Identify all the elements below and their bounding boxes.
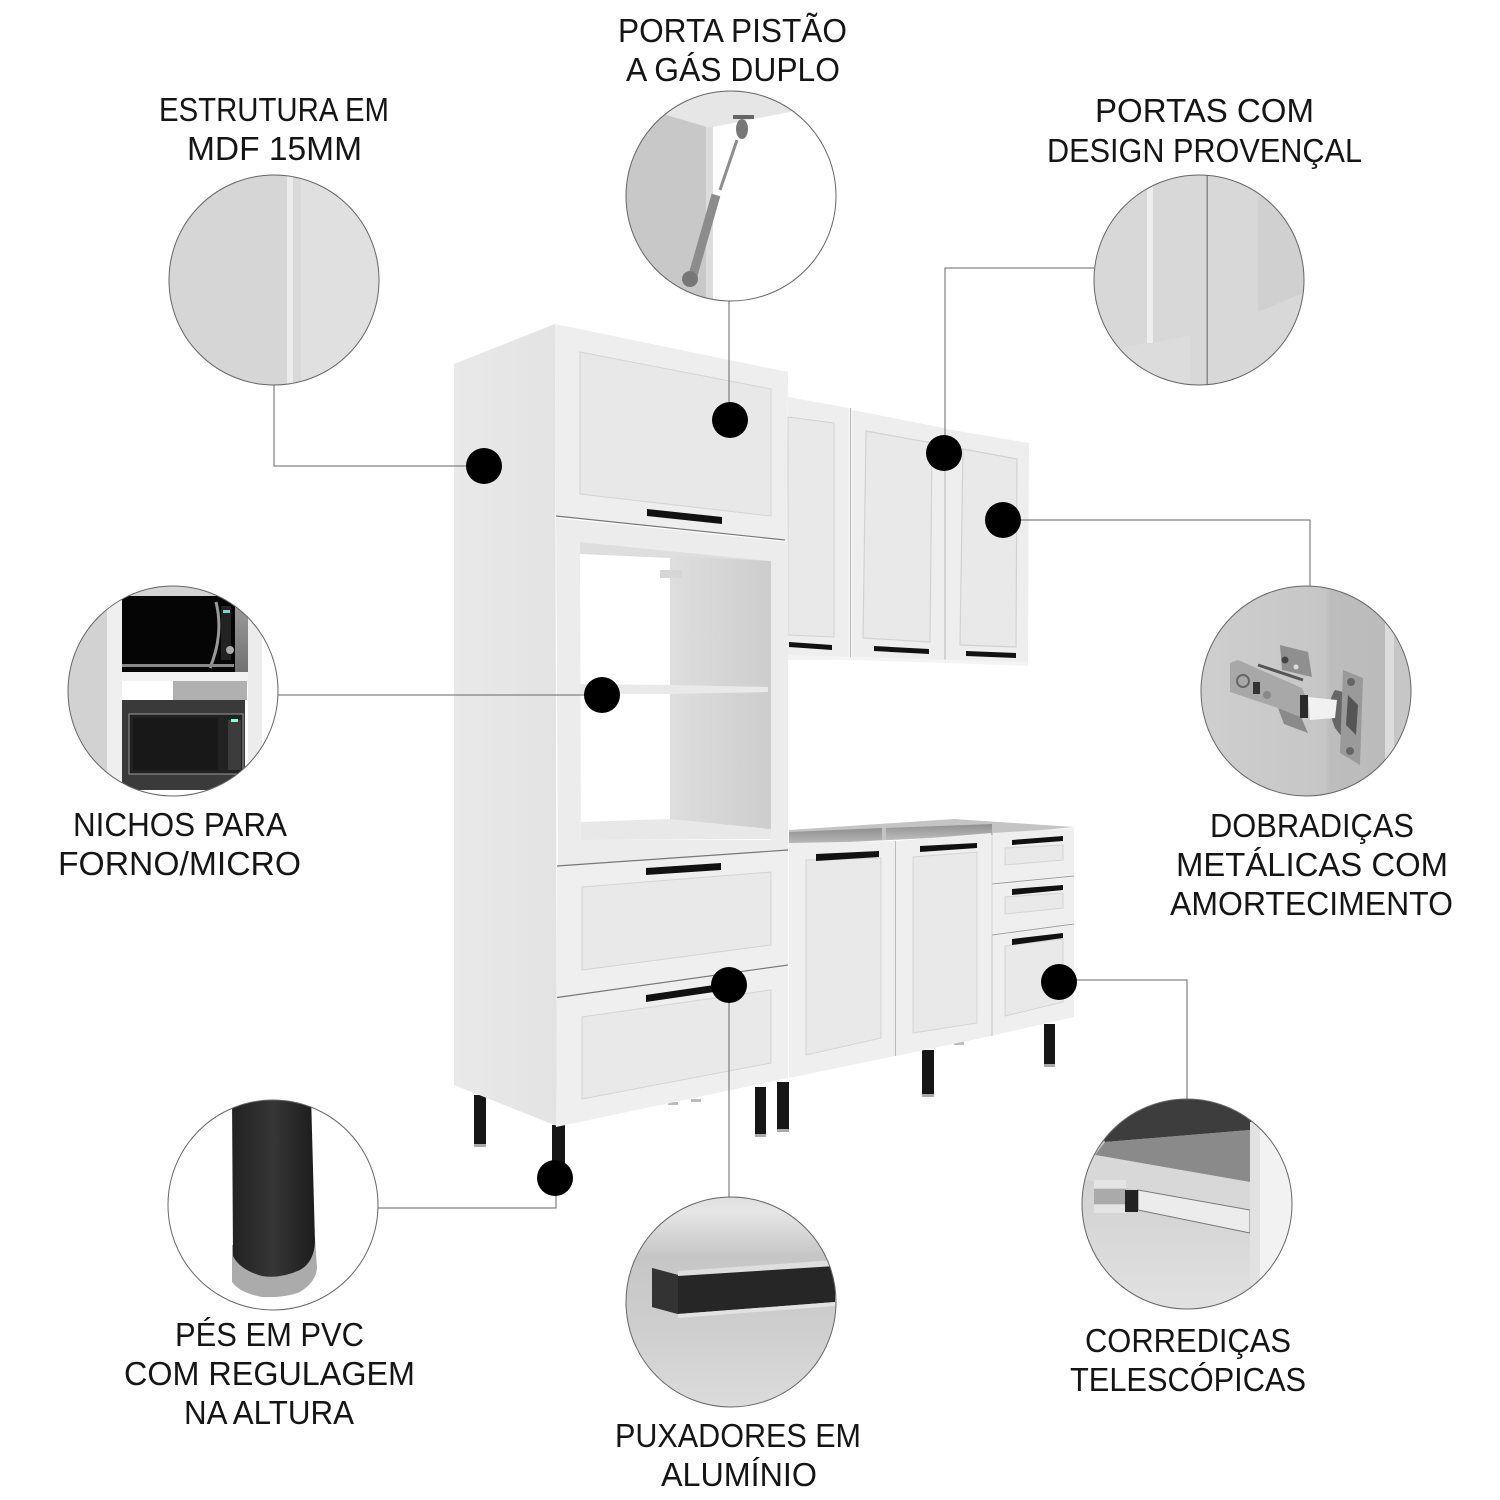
kitchen cabinet illustration	[454, 324, 1074, 1190]
detail circle: soft-close hinge	[1200, 586, 1412, 796]
detail circle: aluminium handle	[626, 1196, 836, 1408]
detail circle: adjustable PVC foot	[168, 1100, 378, 1310]
detail circle: MDF structure	[168, 174, 380, 386]
label: gas piston door	[618, 12, 847, 88]
label: MDF structure	[159, 91, 389, 167]
detail circle: oven and microwave niche	[68, 586, 278, 796]
label: MDF structure: MDF 15MM	[187, 130, 362, 167]
oven and microwave niche	[556, 518, 788, 866]
legs	[474, 1024, 1055, 1190]
base cabinet drawers	[991, 828, 1074, 1036]
label: oven and microwave niches	[58, 806, 301, 882]
label: aluminium handles: ALUMÍNIO	[661, 1456, 817, 1493]
label: PVC feet: COM REGULAGEM	[124, 1355, 415, 1392]
label: oven and microwave niches: NICHOS PARA	[73, 806, 287, 843]
base cabinet worktop opening	[789, 819, 1074, 845]
label: provencal doors: DESIGN PROVENÇAL	[1047, 132, 1362, 169]
label: PVC feet: NA ALTURA	[184, 1394, 354, 1431]
label: provencal doors: PORTAS COM	[1095, 92, 1314, 129]
label: oven and microwave niches: FORNO/MICRO	[58, 845, 301, 882]
label: gas piston door: PORTA PISTÃO	[618, 12, 847, 49]
label: aluminium handles: PUXADORES EM	[615, 1417, 861, 1454]
label: metal hinges	[1170, 807, 1453, 922]
callout dots	[466, 402, 1077, 1196]
connector lines	[274, 268, 1310, 1208]
detail circle: telescopic slides	[1082, 1098, 1292, 1310]
tower top flap door	[555, 324, 788, 540]
label: aluminium handles	[615, 1417, 861, 1493]
detail circle: gas piston	[626, 90, 836, 302]
base cabinet doors	[789, 833, 991, 1078]
label: telescopic slides: CORREDIÇAS	[1085, 1322, 1291, 1359]
tower side panel	[454, 324, 557, 1126]
detail circle: provencal door	[1094, 174, 1304, 386]
label: metal hinges: AMORTECIMENTO	[1170, 885, 1453, 922]
label: metal hinges: METÁLICAS COM	[1176, 846, 1448, 883]
upper wall cabinets	[788, 397, 1029, 666]
label: telescopic slides	[1070, 1322, 1306, 1398]
label: MDF structure: ESTRUTURA EM	[159, 91, 389, 128]
tower drawers	[556, 850, 788, 1127]
label: PVC feet	[124, 1316, 415, 1431]
label: provencal doors	[1047, 92, 1362, 169]
label: PVC feet: PÉS EM PVC	[175, 1316, 364, 1353]
label: gas piston door: A GÁS DUPLO	[626, 51, 840, 88]
label: metal hinges: DOBRADIÇAS	[1210, 807, 1414, 844]
label: telescopic slides: TELESCÓPICAS	[1070, 1361, 1306, 1398]
